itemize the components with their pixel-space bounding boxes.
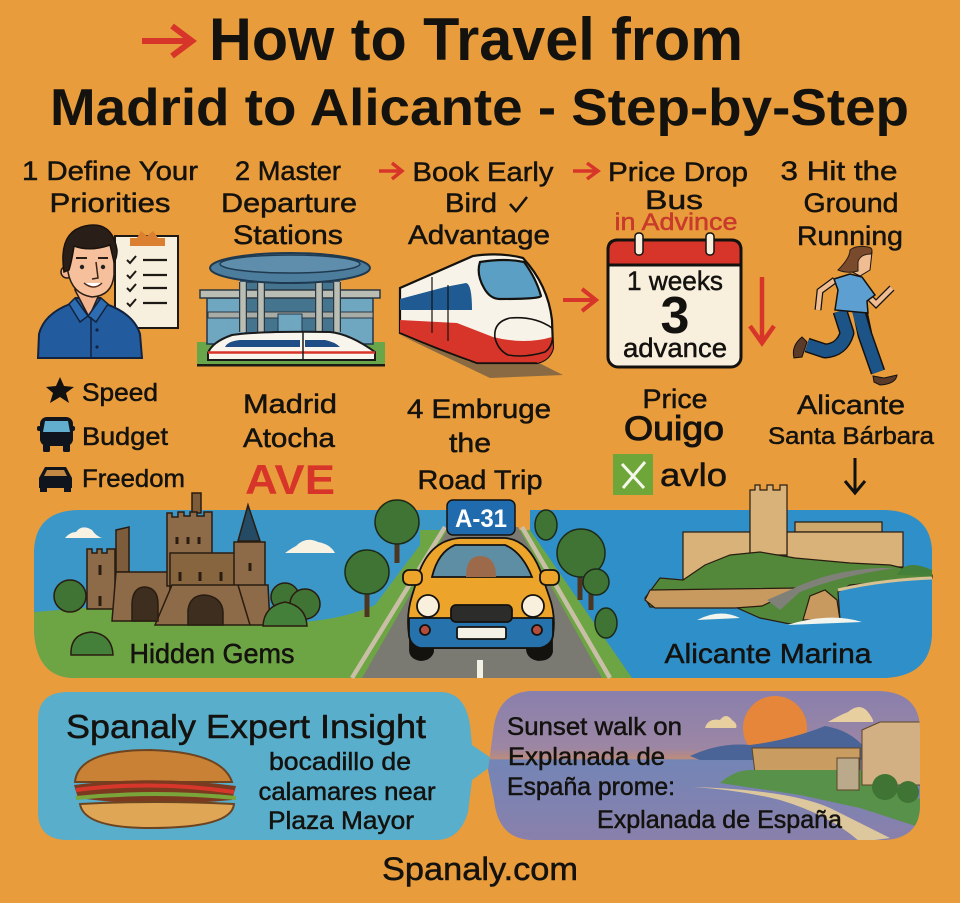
icon: high-speed train	[400, 254, 563, 378]
Price Ouigo avlo label: Price	[642, 384, 708, 414]
Price Ouigo avlo label	[613, 384, 727, 495]
text: Explanada de España	[597, 806, 842, 834]
step 2 heading: Stations	[233, 220, 343, 250]
step 1 heading: Priorities	[50, 188, 170, 218]
step 4 heading: 4 Embruge	[407, 394, 551, 424]
title: Madrid to Alicante - Step-by-Step	[50, 79, 909, 137]
step 4 heading: Road Trip	[418, 465, 542, 495]
footer: Spanaly.com	[382, 851, 578, 887]
Madrid Atocha AVE label: Madrid	[243, 389, 337, 419]
panel: sunset walk	[480, 691, 925, 842]
price drop heading	[573, 157, 748, 215]
price drop heading: Price Drop	[608, 157, 748, 187]
Price Ouigo avlo label: avlo	[660, 457, 727, 493]
book early heading: Advantage	[408, 220, 550, 250]
road sign A-31: A-31	[455, 505, 507, 533]
book early heading: Book Early	[412, 157, 554, 187]
Madrid Atocha AVE label: AVE	[245, 456, 335, 503]
label: speed: Speed	[82, 379, 158, 407]
trees	[345, 500, 617, 638]
text: Sunset walk on	[507, 713, 682, 741]
text	[258, 748, 436, 835]
Alicante Santa Barbara label	[768, 390, 935, 493]
icon: clouds	[65, 527, 335, 553]
arrow right	[563, 289, 596, 311]
calendar: in Advince	[614, 209, 738, 236]
step 2 heading: 2 Master	[235, 156, 341, 186]
icon: yellow car	[403, 538, 559, 660]
icon: train station	[197, 253, 385, 366]
step 1 heading	[22, 156, 198, 218]
calendar: 1 weeks	[627, 266, 723, 296]
step 3 heading: 3 Hit the	[780, 156, 898, 186]
price drop heading: Bus	[645, 185, 703, 215]
heading: Spanaly Expert Insight	[66, 708, 426, 745]
Madrid Atocha AVE label	[243, 389, 337, 503]
icon: running woman	[793, 246, 897, 385]
calendar	[608, 209, 741, 367]
road sign A-31	[447, 500, 515, 535]
arrow down	[750, 277, 774, 343]
Alicante Santa Barbara label: Alicante	[797, 390, 905, 420]
icon: fortress and headland	[645, 485, 932, 625]
panel: road trip scene	[34, 485, 932, 678]
icon: car	[39, 467, 72, 492]
label: freedom: Freedom	[82, 465, 185, 493]
icon: sandwich	[74, 750, 236, 828]
calendar: 3	[661, 287, 689, 345]
title	[50, 6, 909, 137]
text: bocadillo de	[269, 748, 411, 776]
text: calamares near	[258, 778, 436, 806]
step 4 heading: the	[449, 428, 491, 458]
left landscape	[34, 510, 450, 678]
icon: bus	[37, 417, 75, 452]
step 2 heading	[221, 156, 357, 250]
title: How to Travel from	[209, 6, 743, 73]
icon: castle	[54, 493, 320, 655]
label: hidden gems: Hidden Gems	[130, 638, 294, 669]
panel: expert insight callout	[38, 692, 497, 840]
Madrid Atocha AVE label: Atocha	[243, 423, 336, 453]
text: España prome:	[507, 773, 675, 801]
text: Plaza Mayor	[268, 807, 414, 835]
step 3 heading: Ground	[804, 188, 898, 218]
book early heading: Bird	[445, 188, 497, 218]
right landscape	[530, 510, 932, 678]
step 1 heading: 1 Define Your	[22, 156, 198, 186]
text	[507, 713, 842, 834]
legend: priorities	[37, 377, 185, 493]
Alicante Santa Barbara label: Santa Bárbara	[768, 423, 935, 450]
icon: person with checklist	[38, 225, 178, 358]
step 3 heading	[780, 156, 903, 251]
text: Explanada de	[508, 743, 665, 771]
step 4 heading	[407, 394, 551, 495]
label: budget: Budget	[82, 423, 168, 451]
icon: star	[46, 377, 74, 403]
book early heading	[379, 157, 554, 250]
road	[362, 527, 602, 678]
Price Ouigo avlo label: Ouigo	[624, 410, 724, 448]
step 3 heading: Running	[797, 221, 903, 251]
step 2 heading: Departure	[221, 188, 357, 218]
calendar: advance	[623, 333, 727, 363]
label: alicante marina: Alicante Marina	[664, 638, 872, 669]
